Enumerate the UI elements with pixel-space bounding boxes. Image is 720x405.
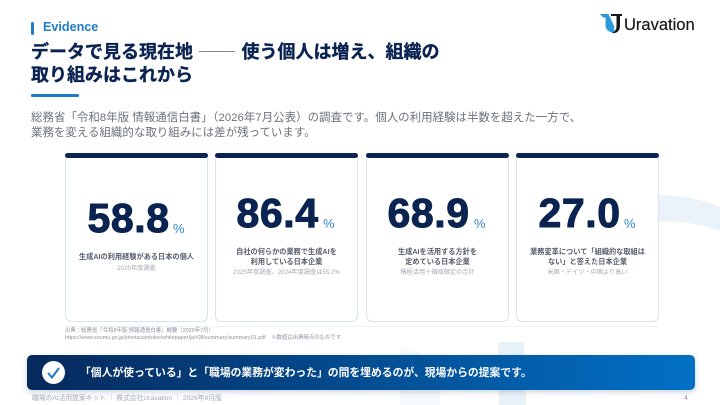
intro text: 総務省「令和8年版 情報通信白書」（2026年7月公表）の調査です。個人の利用経験は半数を超えた一方で、 <box>31 112 581 124</box>
panel: card 1: % <box>173 221 185 236</box>
icon: check mark <box>42 361 65 384</box>
stat label: 生成AIを活用する方針を <box>398 246 477 256</box>
panel: card 3 <box>366 153 509 322</box>
stat note: 積極活用＋領域限定の合計 <box>400 269 475 276</box>
footer text: 職場のAI活用提案キット ｜ 株式会社Uravation ｜ 2026年9月版 <box>32 395 222 402</box>
source note: 出典：総務省「令和8年版 情報通信白書」概要（2026年7月） <box>65 328 214 334</box>
intro text: 業務を変える組織的な取り組みには差が残っています。 <box>31 127 316 139</box>
stat note: 2025年度調査。2024年度調査は55.2% <box>233 269 340 276</box>
logo <box>600 14 695 34</box>
stat label: 生成AIの利用経験がある日本の個人 <box>79 252 194 260</box>
title: データで見る現在地 使う個人は増え、組織の <box>31 42 440 62</box>
panel: card 2 <box>215 153 358 322</box>
page number: 4 <box>684 395 688 402</box>
stat label: ない」と答えた日本企業 <box>548 256 627 266</box>
callout text: 「個人が使っている」と「職場の業務が変わった」の間を埋めるのが、現場からの提案です。 <box>80 367 532 379</box>
stat: 86.4%: 86.4 <box>236 190 319 236</box>
stat: 58.8%: 58.8 <box>88 195 170 241</box>
stat: 68.9%: 68.9 <box>388 190 470 236</box>
panel: card 2: % <box>323 216 335 231</box>
stat note: 2025年度調査 <box>117 264 156 272</box>
callout banner <box>27 355 695 390</box>
icon: logo mark <box>600 14 622 34</box>
section label: Evidence <box>43 20 98 34</box>
title underline <box>31 94 79 97</box>
panel: card 4 <box>516 153 659 322</box>
source note: https://www.soumu.go.jp/johotsusintokei/whitepaper/ja/r08/summary/summary01.pdf ※数値は出典時点のものです <box>65 335 341 341</box>
source note <box>65 326 341 341</box>
title <box>31 42 440 85</box>
stat label <box>398 246 477 266</box>
stat note: 米国・ドイツ・中国より高い <box>547 269 628 276</box>
stat label: 利用している日本企業 <box>251 256 322 266</box>
panel: card 1 <box>65 153 208 322</box>
stat: 27.0%: 27.0 <box>538 190 621 236</box>
stat label: 自社の何らかの業務で生成AIを <box>236 246 337 256</box>
panel: card 3: % <box>474 216 486 231</box>
stat label: 業務変革について「組織的な取組は <box>530 246 645 256</box>
logo wordmark: Uravation <box>624 16 695 34</box>
title: 取り組みはこれから <box>31 65 193 85</box>
stat label: 定めている日本企業 <box>405 256 470 266</box>
stat label <box>236 246 337 266</box>
stat label <box>530 246 645 266</box>
panel: card 4: % <box>624 216 636 231</box>
intro text <box>31 111 581 139</box>
